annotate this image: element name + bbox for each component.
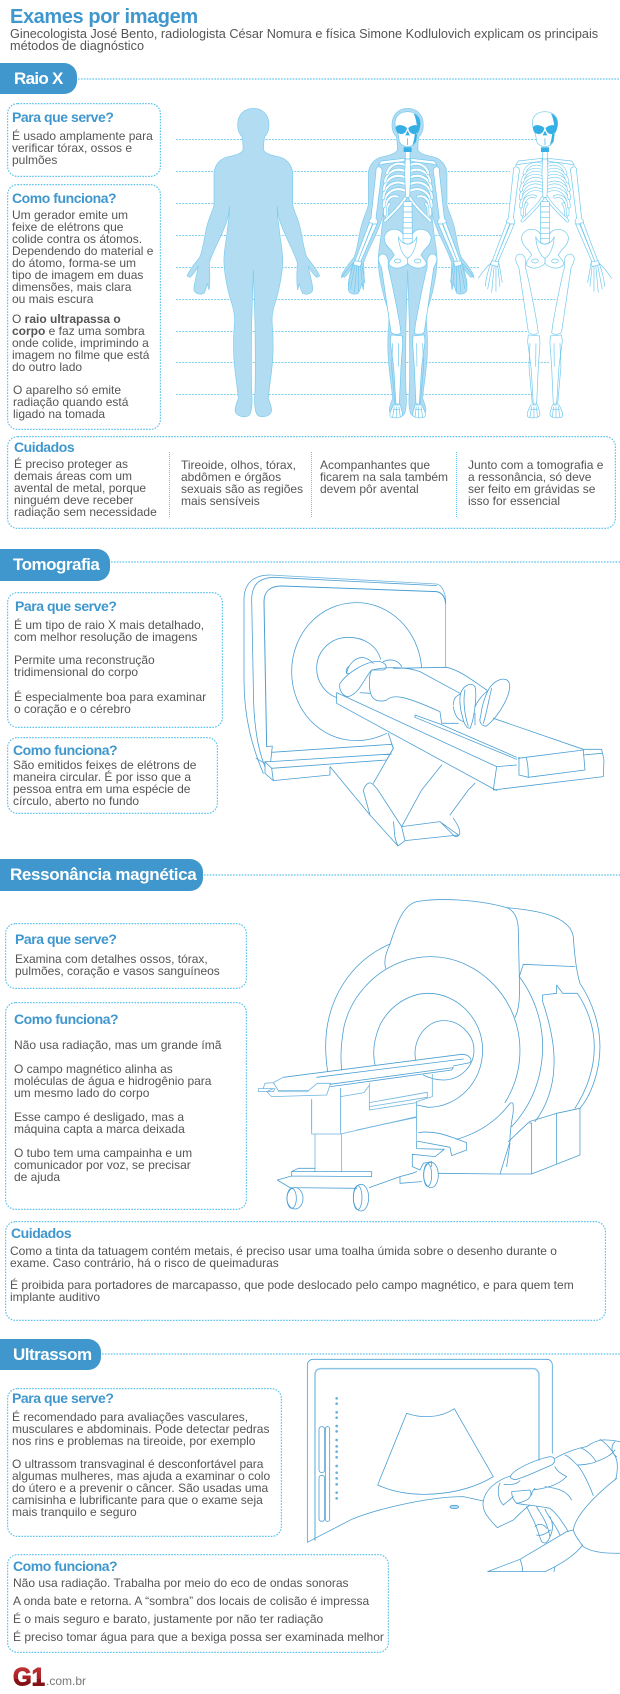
panel: Raio X como funciona	[7, 184, 161, 430]
heading: Para que serve?	[12, 109, 113, 125]
text: transvaginal: algumas mulheres, mas ajuda a examinar o colo	[12, 1469, 270, 1483]
text: transvaginal: mais tranquilo e seguro	[12, 1505, 137, 1519]
heading: Como funciona?	[12, 190, 116, 206]
heading: Como funciona?	[14, 1011, 118, 1027]
text column 4	[468, 458, 603, 508]
text: generator: ou mais escura	[12, 292, 93, 306]
text column 1: radiação sem necessidade	[14, 505, 157, 519]
text line 4: É preciso tomar água para que a bexiga possa ser examinada melhor	[13, 1630, 384, 1644]
text column 1	[14, 457, 157, 519]
section heading: Raio X	[0, 63, 77, 94]
text: tube: comunicador por voz, se precisar	[14, 1158, 191, 1172]
text: heart and brain	[14, 690, 206, 716]
text: transvaginal	[12, 1457, 270, 1519]
text: generator: Um gerador emite um	[12, 208, 128, 222]
text: pulmões	[12, 153, 57, 167]
text: uses: musculares e abdominais. Pode detectar pedras	[12, 1422, 269, 1436]
text column 4: a ressonância, só deve	[468, 470, 591, 484]
logo: G1: .com.br	[46, 1674, 86, 1688]
text: device: radiação quando está	[13, 395, 128, 409]
text: field off: Esse campo é desligado, mas a	[14, 1110, 184, 1124]
heading: Como funciona?	[13, 742, 117, 758]
text: transvaginal: camisinha e lubrificante para que o exame seja	[12, 1493, 263, 1507]
section heading: Tomografia	[0, 549, 110, 581]
text column 2: sexuais são as regiões	[181, 482, 303, 496]
subtitle: métodos de diagnóstico	[10, 39, 144, 53]
text	[15, 952, 220, 978]
text column 4: isso for essencial	[468, 494, 560, 508]
text: magnet: Não usa radiação, mas um grande ímã	[14, 1038, 221, 1052]
section heading: Tomografia: Tomografia	[13, 555, 99, 574]
section heading: Ressonância magnética	[0, 859, 203, 891]
text line 3: É o mais seguro e barato, justamente por não ter radiação	[13, 1612, 323, 1626]
text	[13, 758, 196, 808]
text column 3: Acompanhantes que	[320, 458, 430, 472]
text: pacemaker	[10, 1278, 574, 1304]
illustration: MRI scanner	[258, 900, 600, 1211]
text: É usado amplamente para	[12, 129, 153, 143]
text: pacemaker: implante auditivo	[10, 1290, 100, 1304]
text: Examina com detalhes ossos, tórax,	[15, 952, 208, 966]
text: tube: O tubo tem uma campainha e um	[14, 1146, 192, 1160]
panel: Ultrassom como funciona	[7, 1554, 389, 1653]
subtitle: Ginecologista José Bento, radiologista César Nomura e física Simone Kodlulovich explicam os principais	[10, 27, 598, 41]
text: generator: tipo de imagem em duas	[12, 268, 143, 282]
text: ray passes through body: corpo e faz uma sombra	[12, 324, 145, 338]
text column 2: abdômen e órgãos	[181, 470, 281, 484]
illustration: human body silhouette	[187, 108, 320, 417]
text line 1: Não usa radiação. Trabalha por meio do eco de ondas sonoras	[13, 1576, 349, 1590]
text column 1: demais áreas com um	[14, 469, 132, 483]
heading: Para que serve?	[15, 598, 116, 614]
panel: Ressonância para que serve	[5, 923, 247, 989]
text: tattoo: exame. Caso contrário, há o risco de queimaduras	[10, 1256, 279, 1270]
text line 2: A onda bate e retorna. A “sombra” dos locais de colisão é impressa	[13, 1594, 369, 1608]
section heading: Raio X: Raio X	[14, 69, 63, 88]
text: detail: É um tipo de raio X mais detalhado,	[14, 618, 204, 632]
illustration: body with visible skeleton	[341, 108, 474, 418]
text: generator: colide contra os átomos.	[12, 232, 142, 246]
text: ray passes through body: O raio ultrapassa o	[12, 312, 121, 326]
text column 4: ser feito em grávidas se	[468, 482, 595, 496]
text: pessoa entra em uma espécie de	[13, 782, 190, 796]
panel: Tomografia para que serve	[7, 592, 223, 728]
text: tube	[14, 1146, 192, 1184]
text: tube: de ajuda	[14, 1170, 60, 1184]
title: Exames por imagem	[10, 6, 198, 28]
text: transvaginal: do útero e a prevenir o câncer. São usadas uma	[12, 1481, 268, 1495]
text: generator: dimensões, mais clara	[12, 280, 131, 294]
text: field: um mesmo lado do corpo	[14, 1086, 149, 1100]
text: maneira circular. É por isso que a	[13, 770, 191, 784]
section heading: Ultrassom: Ultrassom	[13, 1345, 92, 1364]
text: field off: máquina capta a marca deixada	[14, 1122, 185, 1136]
text: uses	[12, 1410, 270, 1448]
text column 2: mais sensíveis	[181, 494, 260, 508]
text: device: O aparelho só emite	[13, 383, 121, 397]
text: círculo, aberto no fundo	[13, 794, 139, 808]
text: verificar tórax, ossos e	[12, 141, 132, 155]
text	[12, 129, 153, 167]
illustration: skeleton	[478, 112, 612, 418]
heading: Como funciona?	[13, 1558, 117, 1574]
text: device	[13, 383, 128, 421]
text: field: moléculas de água e hidrogênio para	[14, 1074, 211, 1088]
illustration: ultrasound machine and hand	[307, 1359, 620, 1572]
logo: G1	[13, 1664, 86, 1688]
text: detail: com melhor resolução de imagens	[14, 630, 197, 644]
text column 3: ficarem na sala também	[320, 470, 448, 484]
text: ray passes through body: imagem no filme que está	[12, 348, 149, 362]
section heading: Ressonância magnética: Ressonância magnética	[10, 865, 196, 884]
text column 2	[181, 458, 303, 508]
text: field off	[14, 1110, 185, 1136]
section dotted rules	[78, 79, 620, 1354]
text: São emitidos feixes de elétrons de	[13, 758, 196, 772]
text column 3: devem pôr avental	[320, 482, 419, 496]
text: detail	[14, 618, 204, 644]
text: heart and brain: É especialmente boa para examinar	[14, 690, 206, 704]
heading: Para que serve?	[15, 931, 116, 947]
heading: Cuidados	[14, 439, 74, 455]
text: transvaginal: O ultrassom transvaginal é desconfortável para	[12, 1457, 263, 1471]
text: field	[14, 1062, 212, 1100]
panel: Ressonância como funciona	[5, 1002, 247, 1210]
text: field: O campo magnético alinha as	[14, 1062, 173, 1076]
text column 1: avental de metal, porque	[14, 481, 146, 495]
panel: Ressonância cuidados	[5, 1221, 606, 1321]
text: ray passes through body: do outro lado	[12, 360, 82, 374]
text: uses: nos rins e problemas na tireoide, por exemplo	[12, 1434, 255, 1448]
heading: Para que serve?	[12, 1390, 113, 1406]
text column 3	[320, 458, 448, 496]
text column 2: Tireoide, olhos, tórax,	[181, 458, 296, 472]
text: device: ligado na tomada	[13, 407, 105, 421]
text column 4: Junto com a tomografia e	[468, 458, 603, 472]
panel: Tomografia como funciona	[7, 737, 218, 814]
text: tattoo	[10, 1244, 557, 1270]
text column 1: É preciso proteger as	[14, 457, 128, 471]
text: reconstruction: tridimensional do corpo	[14, 665, 138, 679]
panel: Raio X para que serve	[7, 103, 161, 177]
text: tattoo: Como a tinta da tatuagem contém metais, é preciso usar uma toalha úmida sobre o desenho durante o	[10, 1244, 557, 1258]
text: generator: Dependendo do material e	[12, 244, 153, 258]
text: generator	[12, 208, 153, 306]
text column 1: ninguém deve receber	[14, 493, 133, 507]
text: pulmões, coração e vasos sanguíneos	[15, 964, 220, 978]
subtitle	[10, 27, 598, 53]
text: generator: do átomo, forma-se um	[12, 256, 136, 270]
section heading: Ultrassom	[0, 1339, 101, 1370]
text: reconstruction: Permite uma reconstrução	[14, 653, 155, 667]
text: uses: É recomendado para avaliações vasculares,	[12, 1410, 248, 1424]
guide lines behind the bodies	[176, 140, 560, 394]
text: heart and brain: o coração e o cérebro	[14, 702, 131, 716]
text: ray passes through body	[12, 312, 150, 374]
illustration: CT scanner	[244, 575, 604, 846]
panel: Raio X cuidados	[7, 436, 616, 529]
text: reconstruction	[14, 653, 155, 679]
text: pacemaker: É proibida para portadores de marcapasso, que pode deslocado pelo campo magnético, e para quem tem	[10, 1278, 574, 1292]
heading: Cuidados	[11, 1225, 71, 1241]
text: ray passes through body: onde colide, imprimindo a	[12, 336, 149, 350]
panel: Ultrassom para que serve	[7, 1388, 282, 1537]
text: generator: feixe de elétrons que	[12, 220, 123, 234]
